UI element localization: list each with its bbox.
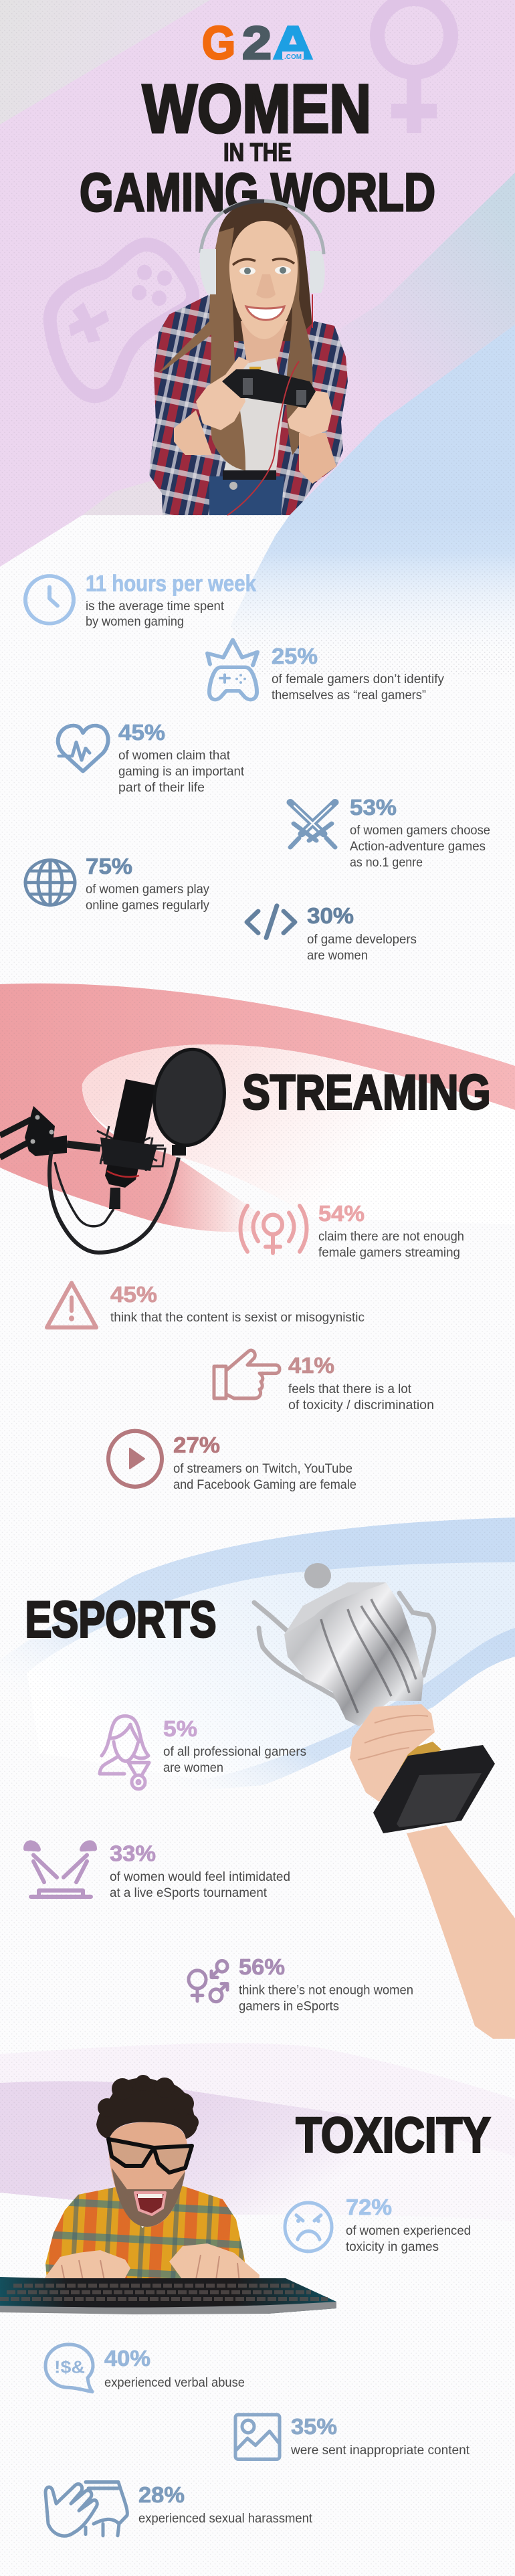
nose: [256, 274, 276, 298]
trophy base: [373, 1745, 495, 1833]
gold stem: [395, 1742, 441, 1793]
stat: 11 hours: [25, 571, 256, 629]
stat: 28%: experienced sexual harassment: [138, 2512, 313, 2526]
hands: [196, 357, 249, 430]
stat: 53%: 53%: [350, 795, 397, 820]
beard: [112, 2168, 185, 2227]
controller: [222, 369, 316, 408]
glasses: [108, 2139, 192, 2173]
cables: [49, 1151, 179, 1253]
neck: [241, 321, 288, 368]
stat: 5%: of all professional gamers: [163, 1745, 306, 1759]
stat: 75%: online games regularly: [86, 899, 209, 913]
white tee: [224, 358, 284, 470]
stat: 53%: as no.1 genre: [350, 856, 423, 870]
stat: 54%: female gamers streaming: [318, 1246, 460, 1260]
icon: warning triangle: [47, 1283, 96, 1327]
pop filter: [148, 1044, 231, 1150]
shirt: [45, 2186, 247, 2280]
stat: 11 hours: by women gaming: [86, 615, 184, 629]
stat: 41%: [214, 1350, 434, 1412]
mic body: [105, 1079, 156, 1188]
stat: 45%: 45%: [110, 1282, 157, 1307]
stat: 11 hours: is the average time spent: [86, 600, 225, 614]
stat: 45%: part of their life: [118, 781, 205, 795]
stat: 25%: 25%: [272, 644, 318, 668]
stat: 41%: 41%: [288, 1353, 334, 1378]
stat: 27%: [108, 1431, 356, 1492]
stat: 25%: themselves as “real gamers”: [272, 688, 426, 703]
stat: 35%: 35%: [291, 2414, 337, 2439]
logo: G: [202, 17, 235, 69]
stat: 35%: [235, 2414, 470, 2459]
icon: code brackets: [247, 906, 295, 938]
heading: esports: ESPORTS: [25, 1591, 217, 1649]
icon: play button: [108, 1431, 162, 1487]
icon: woman with medal: [100, 1716, 149, 1789]
stat: 27%: 27%: [173, 1433, 220, 1457]
stat: 75%: 75%: [86, 854, 132, 879]
stat: 11 hours: 11 hours per week: [86, 571, 256, 597]
stat: 30%: of game developers: [307, 933, 417, 947]
stat: 40%: experienced verbal abuse: [104, 2376, 245, 2390]
face: [229, 221, 298, 339]
stat: 41%: feels that there is a lot: [288, 1382, 412, 1396]
stat: 30%: 30%: [307, 903, 354, 928]
logo: [202, 17, 313, 69]
icon: game controller watermark: [50, 245, 193, 396]
stat: 75%: [25, 854, 209, 913]
hair: [96, 2075, 199, 2139]
hands: [43, 2250, 130, 2288]
shirt: [149, 294, 348, 515]
icon: picture: [235, 2415, 280, 2459]
logo: .COM: [284, 54, 302, 61]
icon: crowned gamepad: [207, 640, 258, 700]
cable: [227, 294, 312, 515]
stat: 53%: of women gamers choose: [350, 824, 490, 838]
stat: 53%: [290, 795, 490, 870]
photo: trophy in raised hand: [254, 1563, 515, 2039]
stat: 41%: of toxicity / discrimination: [288, 1398, 434, 1412]
stat: 30%: are women: [307, 949, 368, 963]
hand: [350, 1704, 435, 1802]
stat: 27%: and Facebook Gaming are female: [173, 1478, 356, 1492]
stat: 56%: gamers in eSports: [239, 1999, 339, 2014]
stat: 45%: think that the content is sexist or misogynistic: [110, 1311, 365, 1325]
face: [108, 2122, 187, 2227]
panel: hero: [50, 0, 515, 676]
stat: 28%: [45, 2482, 313, 2536]
logo: 2: [242, 17, 272, 69]
stat: 72%: of women experienced: [346, 2224, 471, 2238]
keyboard: [0, 2277, 336, 2314]
panel: toxicity: [0, 2075, 491, 2536]
icon: crossed swords: [290, 802, 335, 847]
stat: 45%: of women claim that: [118, 749, 231, 763]
icon: stage spotlights: [25, 1842, 95, 1897]
stat: 54%: [241, 1201, 464, 1260]
stat: 54%: 54%: [318, 1201, 365, 1226]
icon: heart with pulse: [58, 726, 108, 771]
stat: 27%: of streamers on Twitch, YouTube: [173, 1462, 352, 1476]
arm: [407, 1825, 515, 2039]
mouth: [135, 2193, 165, 2215]
icon: pointing hand: [214, 1350, 280, 1398]
title: [80, 71, 435, 223]
boom arm: [0, 1119, 31, 1158]
stat: 5%: are women: [163, 1761, 223, 1775]
stat: 56%: 56%: [239, 1954, 285, 1979]
handles: [254, 1593, 434, 1713]
icon: hand and underwear: [45, 2482, 127, 2536]
stat: 54%: claim there are not enough: [318, 1230, 464, 1244]
stat: 33%: [25, 1841, 290, 1900]
stat: 75%: of women gamers play: [86, 883, 209, 897]
photo: studio microphone: [0, 1044, 231, 1253]
icon: clock: [25, 576, 74, 624]
stat: 25%: [207, 640, 444, 703]
arms: [174, 410, 212, 455]
panel: streaming: [0, 1044, 491, 1492]
icon: globe: [25, 860, 75, 905]
cup: [284, 1582, 423, 1726]
icon: gender symbols: [189, 1960, 227, 2002]
icon: female symbol watermark: [377, 0, 451, 133]
photo: angry gamer at keyboard: [0, 2075, 336, 2314]
icon: female signal: [241, 1206, 306, 1253]
title: WOMEN: [142, 71, 371, 147]
icon: swearing speech bubble: !$&: [54, 2358, 85, 2377]
stat: 5%: 5%: [163, 1716, 197, 1741]
stat: 56%: think there’s not enough women: [239, 1983, 413, 1998]
stat: 28%: 28%: [138, 2482, 185, 2507]
stat: 33%: 33%: [110, 1841, 156, 1865]
stat: 53%: Action-adventure games: [350, 840, 486, 854]
shape: blue corner overlapping the photo: [231, 325, 515, 676]
title: IN THE: [223, 139, 292, 167]
stat: 45%: [58, 720, 245, 795]
stat: 33%: of women would feel intimidated: [110, 1870, 290, 1884]
stat: 40%: [45, 2344, 245, 2392]
stat: 72%: [285, 2195, 471, 2254]
photo: woman with controller: [149, 201, 348, 515]
panel: key statistics: [25, 571, 490, 963]
stat: 45%: [47, 1282, 365, 1327]
stat: 25%: of female gamers don’t identify: [272, 672, 444, 686]
hair strands: [159, 227, 245, 470]
shock mount: [97, 1126, 165, 1171]
headphones: [201, 201, 324, 254]
brows and eyes: [233, 259, 294, 265]
hair back: [209, 201, 313, 455]
stat: 56%: [189, 1954, 413, 2014]
stat: 72%: 72%: [346, 2195, 392, 2219]
icon: angry face: [285, 2203, 332, 2251]
stat: 45%: gaming is an important: [118, 765, 245, 779]
logo: A: [273, 17, 313, 69]
stat: 40%: 40%: [104, 2346, 150, 2371]
stat: 72%: toxicity in games: [346, 2240, 439, 2254]
jeans: [209, 476, 284, 515]
panel: esports: [25, 1563, 515, 2039]
icon: swearing speech bubble: [45, 2344, 93, 2392]
stat: 35%: were sent inappropriate content: [290, 2444, 470, 2458]
stat: 45%: 45%: [118, 720, 165, 745]
title: GAMING WORLD: [80, 163, 435, 223]
stat: 33%: at a live eSports tournament: [110, 1886, 268, 1900]
stat: 30%: [247, 903, 417, 963]
mouth: [246, 306, 284, 320]
stat: 5%: [100, 1716, 306, 1789]
